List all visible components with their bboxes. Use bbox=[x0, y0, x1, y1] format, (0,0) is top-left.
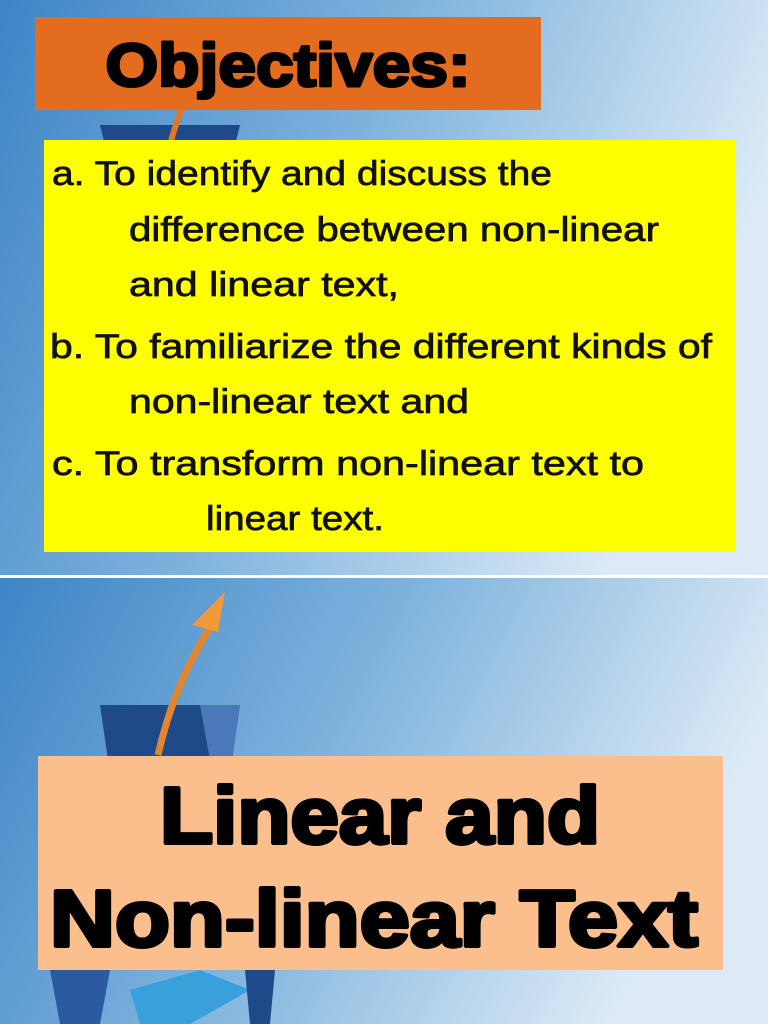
top slide decoration: towers bbox=[100, 100, 240, 145]
slide 2 background bbox=[0, 578, 768, 1024]
title box: Linear and Non-linear Text: Linear and bbox=[160, 771, 600, 860]
title box: Objectives bbox=[35, 17, 541, 110]
slide 1 background bbox=[0, 0, 768, 575]
objective b: b. To familiarize the different kinds of bbox=[50, 328, 713, 366]
objective c: linear text. bbox=[206, 500, 384, 538]
objective c bbox=[52, 445, 644, 538]
objective b: non-linear text and bbox=[129, 383, 469, 421]
objective a: a. To identify and discuss the bbox=[52, 155, 552, 193]
objective a bbox=[52, 155, 659, 304]
objective a: difference between non-linear bbox=[129, 211, 659, 249]
title box: Objectives: Objectives: bbox=[106, 32, 470, 99]
objective c: c. To transform non-linear text to bbox=[52, 445, 644, 483]
title box: Linear and Non-linear Text bbox=[38, 756, 723, 970]
bottom slide decoration: tower and arrow bbox=[50, 592, 275, 1024]
objective a: and linear text, bbox=[129, 266, 399, 304]
title box: Linear and Non-linear Text: Non-linear Text bbox=[50, 874, 698, 963]
objective b bbox=[50, 328, 713, 421]
panel: objectives list bbox=[44, 140, 736, 552]
